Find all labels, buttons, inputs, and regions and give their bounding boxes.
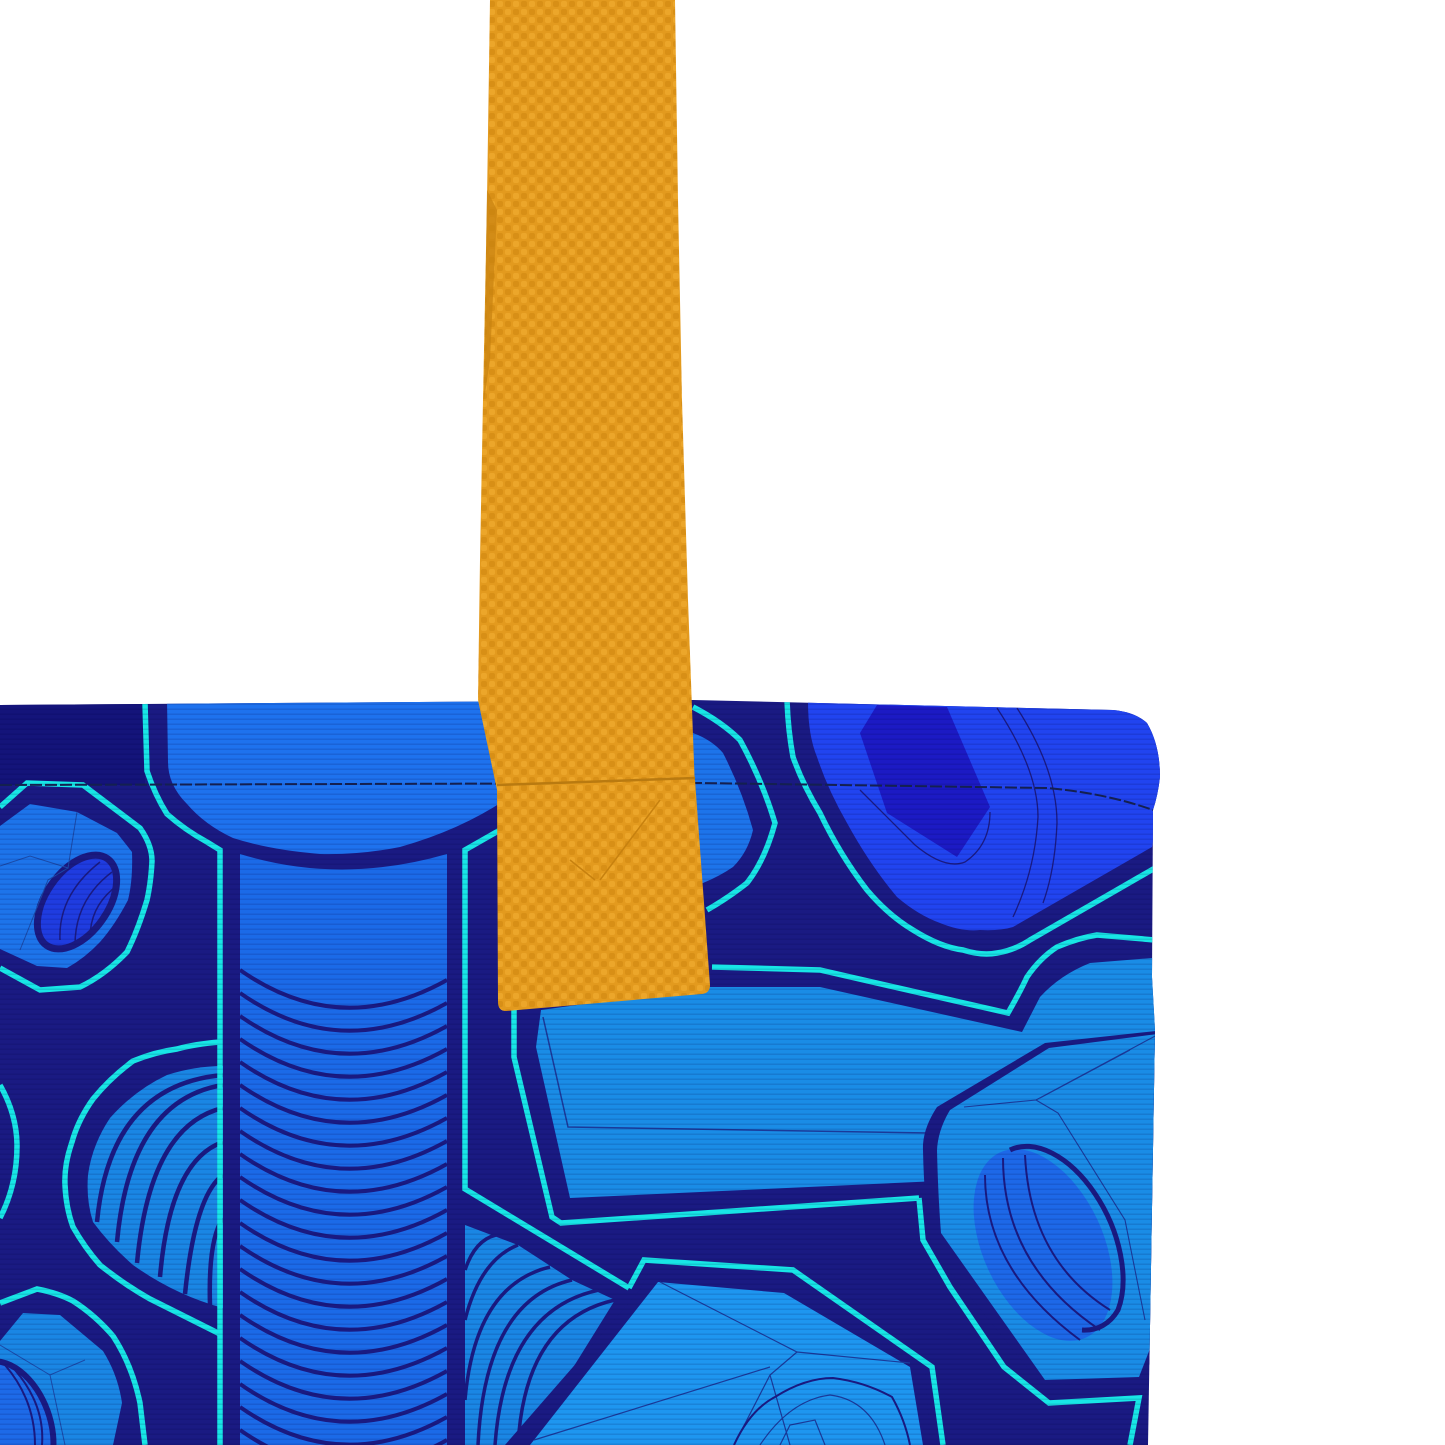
nut, top left <box>0 783 152 990</box>
nut, bottom left <box>0 1289 145 1445</box>
threaded bolt end, left <box>65 1042 223 1334</box>
bag top seam <box>0 783 1153 810</box>
small nut behind strap <box>680 707 775 910</box>
threaded bolt, bottom centre <box>465 1225 615 1445</box>
bolt head <box>167 700 505 854</box>
central bolt <box>145 700 629 1445</box>
nut facet lines <box>964 1035 1157 1320</box>
strap upper <box>478 0 695 790</box>
washer face <box>808 702 1165 930</box>
bolt outline, right <box>465 830 629 1288</box>
nut facet lines and bore <box>534 1282 910 1445</box>
bolt shank <box>240 854 447 1445</box>
washer thin lines <box>860 708 1057 917</box>
strap stitching <box>570 800 660 880</box>
threaded hole <box>34 852 120 952</box>
large washer with hex recess, top right <box>787 700 1165 954</box>
strap crease shadow <box>484 190 497 400</box>
bolt outline, left <box>145 703 220 1445</box>
hex nut, bottom centre <box>505 1260 943 1445</box>
gold strap <box>478 0 710 1011</box>
strap stitched end <box>497 780 710 1011</box>
navy fabric <box>0 700 1165 1445</box>
bag body <box>0 700 1165 1445</box>
washer outline <box>787 700 1155 954</box>
nut threaded hole <box>974 1150 1112 1341</box>
strap fold line <box>497 778 695 785</box>
threaded hole <box>0 1358 56 1445</box>
horizontal hex bolt, right <box>514 935 1165 1223</box>
bolt thread <box>240 970 447 1445</box>
left edge ring <box>0 1085 17 1218</box>
hex recess <box>860 705 990 857</box>
darker top hem, left <box>2 704 141 705</box>
fabric weave overlay <box>0 700 1165 1445</box>
big hex nut, right <box>919 1030 1165 1445</box>
